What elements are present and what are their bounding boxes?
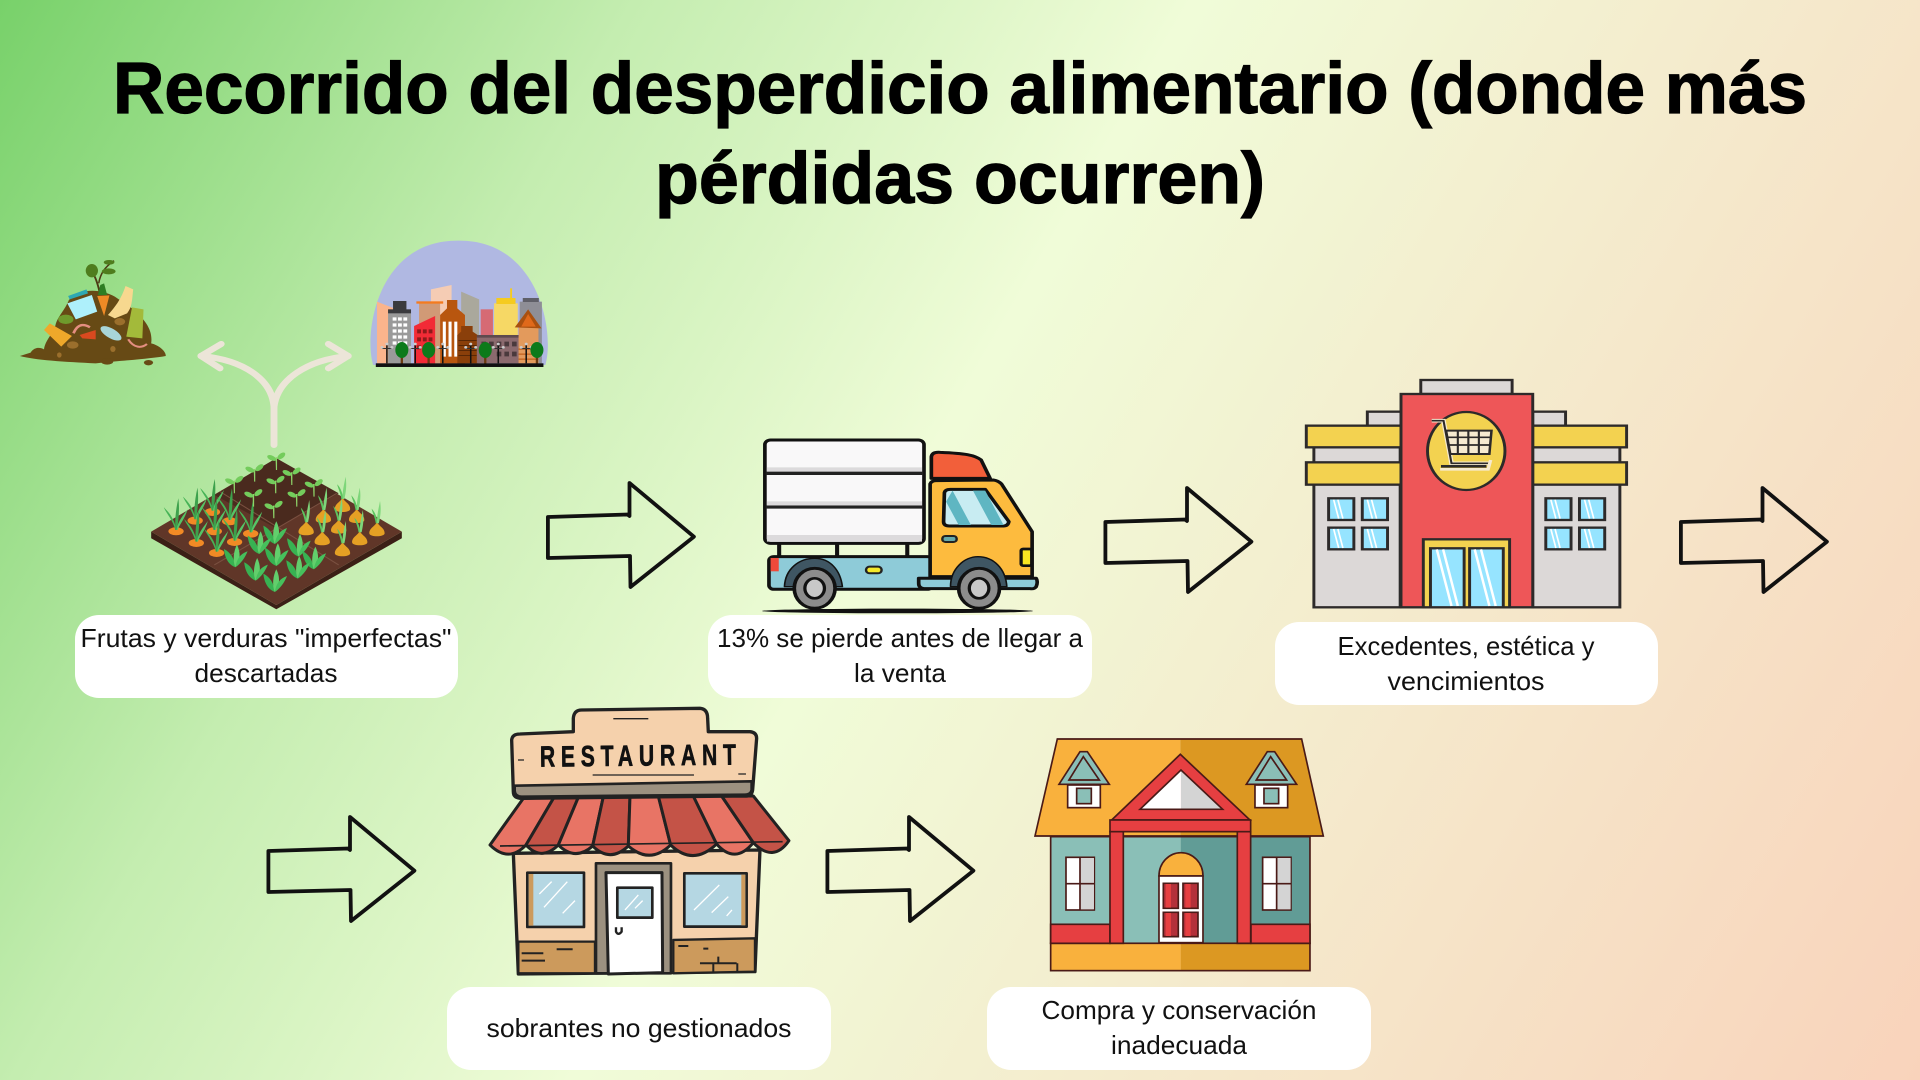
arrow: supermarket to next row <box>1681 488 1827 592</box>
callout: surplus: Excedentes, estética y <box>1338 631 1594 661</box>
icon: city dome <box>370 241 548 367</box>
callout: imperfect produce: descartadas <box>194 658 338 688</box>
callout: surplus <box>1275 622 1658 705</box>
callout: purchase and storage: Compra y conservación <box>1042 995 1316 1025</box>
title <box>113 49 1807 219</box>
arrow: split towards compost and city <box>201 344 348 445</box>
callout: imperfect produce <box>75 615 458 698</box>
callout: purchase and storage <box>987 987 1371 1070</box>
title: pérdidas ocurren) <box>655 139 1265 219</box>
icon: supermarket <box>1306 380 1627 607</box>
arrow: into restaurant <box>268 817 414 921</box>
icon: delivery truck <box>762 440 1037 613</box>
callout: 13% lost: 13% se pierde antes de llegar a <box>717 623 1084 653</box>
callout: leftovers <box>447 987 831 1070</box>
icon: restaurant <box>490 708 789 974</box>
callout: imperfect produce: Frutas y verduras "imperfectas" <box>80 623 452 653</box>
restaurant sign lettering: RESTAURANT <box>540 739 736 774</box>
icon: compost pile <box>20 260 166 365</box>
callout: surplus: vencimientos <box>1388 666 1544 696</box>
arrow: field to truck <box>548 483 694 587</box>
icon: house <box>1035 739 1323 971</box>
callout: purchase and storage: inadecuada <box>1111 1030 1248 1060</box>
icon: crop field <box>151 451 402 609</box>
arrow: restaurant to home <box>827 817 973 921</box>
title: Recorrido del desperdicio alimentario (donde más <box>113 49 1807 129</box>
callout: 13% lost: la venta <box>854 658 947 688</box>
arrow: truck to supermarket <box>1105 488 1251 592</box>
callout: 13% lost <box>708 615 1092 698</box>
callout: leftovers: sobrantes no gestionados <box>486 1013 792 1043</box>
